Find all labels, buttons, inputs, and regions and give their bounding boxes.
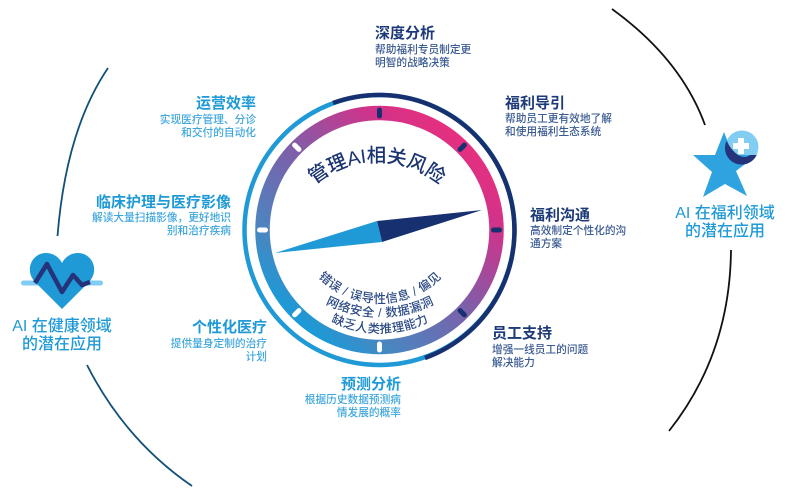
item: 深度分析: 深度分析: [375, 24, 435, 42]
item: 个性化医疗: 计划: [246, 350, 267, 363]
item: 个性化医疗: 个性化医疗: [192, 318, 267, 336]
item: 员工支持: [492, 325, 589, 369]
item: 福利导引: [505, 95, 612, 138]
dial ticks: [257, 108, 502, 352]
compass dial: [242, 92, 517, 368]
icon: star with plus: [693, 130, 758, 197]
left outer arc, lower: [87, 365, 192, 486]
item: 福利沟通: [530, 206, 626, 250]
item: 预测分析: 情发展的概率: [337, 406, 401, 419]
item: 福利导引: 和使用福利生态系统: [505, 125, 602, 138]
dial title: 管理AI相关风险: [308, 146, 446, 184]
heading: AI in benefits: 的潜在应用: [685, 221, 765, 240]
item: 深度分析: [375, 24, 472, 69]
risk list: [319, 271, 441, 334]
item: 福利导引: 福利导引: [505, 95, 565, 112]
item: 福利沟通: 通方案: [530, 237, 562, 250]
item: 临床护理与医疗影像: 临床护理与医疗影像: [96, 193, 231, 211]
heading: AI in health: 的潜在应用: [22, 334, 102, 353]
item: 福利导引: 帮助员工更有效地了解: [505, 112, 612, 125]
item: 临床护理与医疗影像: [92, 193, 231, 237]
heading: AI in benefits: [675, 204, 775, 240]
item: 深度分析: 帮助福利专员制定更: [375, 43, 472, 56]
heading: AI in benefits: AI 在福利领域: [675, 204, 775, 222]
item: 运营效率: [160, 94, 256, 139]
right outer arc, upper: [612, 9, 705, 125]
item: 个性化医疗: 提供量身定制的治疗: [171, 337, 267, 350]
item: 福利沟通: 福利沟通: [530, 206, 590, 224]
right outer arc, lower: [669, 250, 731, 431]
item: 临床护理与医疗影像: 别和治疗疾病: [167, 224, 231, 237]
risk list: 错误 / 误导性信息 / 偏见: [319, 271, 441, 304]
item: 运营效率: 和交付的自动化: [181, 126, 256, 139]
outer ring: light blue segment: [244, 95, 514, 365]
item: 福利沟通: 高效制定个性化的沟: [530, 224, 626, 237]
gradient ring: [262, 113, 496, 347]
heading: AI in health: AI 在健康领域: [12, 316, 112, 335]
heading: AI in health: [12, 316, 112, 353]
item: 员工支持: 员工支持: [492, 325, 552, 342]
item: 预测分析: 预测分析: [341, 375, 401, 393]
item: 预测分析: [305, 375, 401, 419]
item: 运营效率: 运营效率: [196, 94, 256, 112]
compass needle: [275, 210, 482, 253]
item: 预测分析: 根据历史数据预测病: [305, 393, 401, 406]
item: 临床护理与医疗影像: 解读大量扫描影像，更好地识: [92, 211, 231, 224]
left outer arc, upper: [58, 68, 108, 236]
item: 运营效率: 实现医疗管理、分诊: [160, 113, 256, 126]
risk list: 缺乏人类推理能力: [332, 312, 427, 334]
item: 个性化医疗: [171, 318, 267, 363]
icon: heart with pulse: [21, 253, 103, 309]
item: 员工支持: 解决能力: [492, 356, 535, 369]
risk list: 网络安全 / 数据漏洞: [326, 295, 434, 318]
item: 员工支持: 增强一线员工的问题: [492, 343, 589, 356]
outer ring: navy segment: [333, 95, 514, 358]
item: 深度分析: 明智的战略决策: [375, 56, 450, 69]
